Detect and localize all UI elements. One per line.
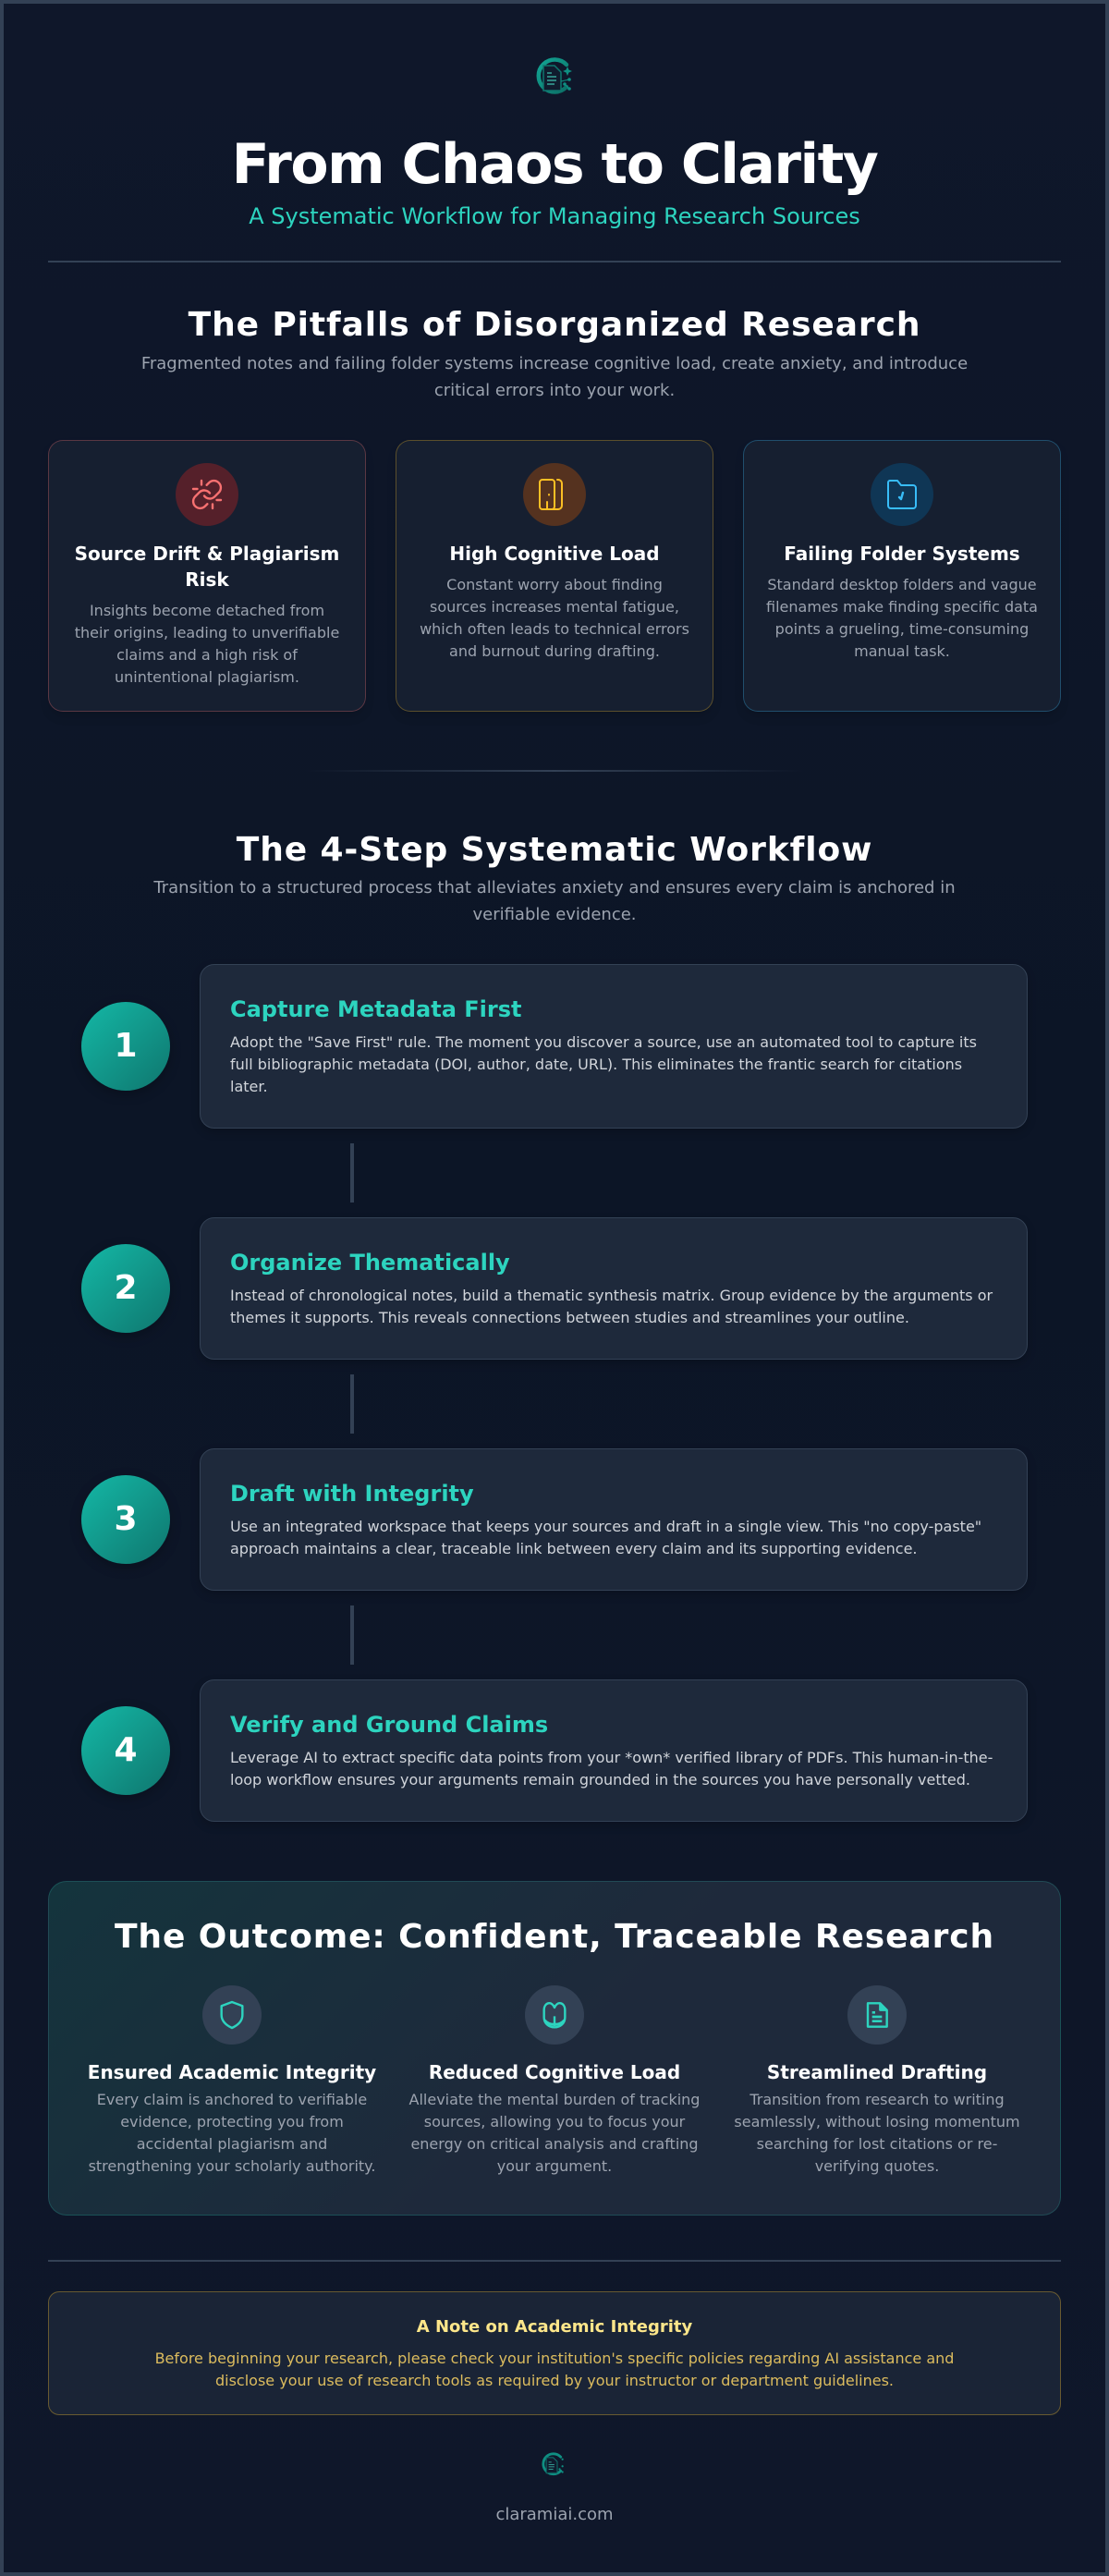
step 4 text [230, 1749, 993, 1789]
text: note: disclose your use of research tools as required by your instructor or department guidelines. [215, 2372, 894, 2389]
text: note: Before beginning your research, please check your institution's specific policies regarding AI assistance and [155, 2350, 954, 2367]
panel: source drift [48, 440, 366, 712]
text: cognitive load: sources increases mental fatigue, [430, 598, 679, 616]
step card 3 [200, 1448, 1028, 1591]
step 1 text: later. [230, 1078, 268, 1095]
heading: folder systems: Failing Folder Systems [784, 543, 1020, 565]
text: workflow intro [153, 878, 956, 924]
step 4 text: Leverage AI to extract specific data points from your *own* verified library of PDFs. This human-in-the- [230, 1749, 993, 1766]
step 3 text: Use an integrated workspace that keeps your sources and draft in a single view. This "no copy-paste" [230, 1518, 981, 1535]
panel: academic integrity note [48, 2291, 1061, 2415]
icon: folder [871, 463, 933, 526]
step number 2: 2 [114, 1269, 138, 1307]
heading: load: Reduced Cognitive Load [429, 2061, 680, 2083]
heading: outcome: The Outcome: Confident, Traceable Research [115, 1918, 994, 1956]
step number 1: 1 [114, 1027, 138, 1065]
step number 2 [81, 1244, 170, 1333]
text: pitfalls intro: Fragmented notes and failing folder systems increase cognitive load, create anxiety, and introduce [141, 354, 968, 373]
text: workflow intro: verifiable evidence. [472, 905, 637, 924]
title: From Chaos to Clarity [232, 132, 877, 197]
heading: workflow: The 4-Step Systematic Workflow [237, 831, 872, 869]
text: load: Alleviate the mental burden of tracking [409, 2091, 700, 2108]
text: source drift [75, 602, 339, 686]
step card 2 [200, 1217, 1028, 1360]
text: drafting [734, 2091, 1020, 2175]
step 1 heading: Capture Metadata First [230, 996, 521, 1022]
text: cognitive load: Constant worry about finding [446, 576, 663, 593]
text: pitfalls intro: critical errors into your work. [434, 381, 675, 400]
step 3 text: approach maintains a clear, traceable link between every claim and its supporting evidence. [230, 1540, 918, 1557]
divider [48, 261, 1061, 262]
text: integrity: evidence, protecting you from [120, 2113, 344, 2130]
text: cognitive load: and burnout during drafting. [449, 642, 660, 660]
heading: integrity: Ensured Academic Integrity [88, 2061, 376, 2083]
step number 4: 4 [114, 1731, 138, 1769]
heading: note: A Note on Academic Integrity [417, 2317, 692, 2337]
text: workflow intro: Transition to a structured process that alleviates anxiety and ensures every claim is anchored in [153, 878, 956, 897]
step 2 heading: Organize Thematically [230, 1250, 510, 1276]
text: cognitive load [420, 576, 689, 660]
step number 3 [81, 1475, 170, 1564]
section divider [305, 770, 804, 772]
step card 1 [200, 964, 1028, 1129]
step number 1 [81, 1002, 170, 1091]
step 3 heading: Draft with Integrity [230, 1481, 474, 1507]
text: load [408, 2091, 700, 2175]
text: pitfalls intro [141, 354, 968, 400]
step 2 text: themes it supports. This reveals connections between studies and streamlines your outline. [230, 1309, 909, 1326]
step 1 text: full bibliographic metadata (DOI, author, date, URL). This eliminates the frantic search for citations [230, 1056, 962, 1073]
text: drafting: searching for lost citations or re- [757, 2135, 997, 2153]
text: load: energy on critical analysis and crafting [410, 2135, 699, 2153]
text: source drift: unintentional plagiarism. [115, 668, 299, 686]
text: folder systems: points a grueling, time-consuming [775, 620, 1029, 638]
text: folder systems: Standard desktop folders and vague [767, 576, 1037, 593]
step 4 heading: Verify and Ground Claims [230, 1712, 548, 1738]
divider [48, 2260, 1061, 2262]
text: folder systems: manual task. [854, 642, 950, 660]
text: drafting: Transition from research to writing [749, 2091, 1005, 2108]
step 1 text: Adopt the "Save First" rule. The moment you discover a source, use an automated tool to capture its [230, 1033, 977, 1051]
step card 4 [200, 1679, 1028, 1822]
text: integrity: accidental plagiarism and [137, 2135, 327, 2153]
heading: pitfalls: The Pitfalls of Disorganized Research [189, 306, 920, 344]
text: source drift: Insights become detached from [90, 602, 324, 619]
step 2 text: Instead of chronological notes, build a thematic synthesis matrix. Group evidence by the arguments or [230, 1287, 993, 1304]
icon: brain [525, 1985, 584, 2045]
text: cognitive load: which often leads to technical errors [420, 620, 689, 638]
text: folder systems: filenames make finding specific data [766, 598, 1038, 616]
text: integrity: Every claim is anchored to verifiable [97, 2091, 367, 2108]
logo: top [536, 57, 572, 94]
connector 2 [350, 1374, 354, 1434]
panel: outcome [48, 1881, 1061, 2216]
connector 1 [350, 1143, 354, 1203]
text: integrity [89, 2091, 375, 2175]
step number 4 [81, 1706, 170, 1795]
text: source drift: claims and a high risk of [116, 646, 298, 664]
icon: shield [202, 1985, 262, 2045]
heading: cognitive load: High Cognitive Load [449, 543, 660, 565]
icon: document [847, 1985, 907, 2045]
heading: source drift: Source Drift & Plagiarism [75, 543, 339, 565]
icon: device [523, 463, 586, 526]
step 1 text [230, 1033, 977, 1095]
text: note [155, 2350, 954, 2389]
text: load: your argument. [497, 2157, 612, 2175]
text: load: sources, allowing you to focus your [424, 2113, 685, 2130]
footer: site url: claramiai.com [495, 2505, 614, 2524]
text: folder systems [766, 576, 1038, 660]
heading: source drift: Risk [185, 568, 229, 591]
text: drafting: seamlessly, without losing momentum [734, 2113, 1020, 2130]
logo: footer [542, 2452, 564, 2475]
heading: source drift [75, 543, 339, 591]
panel: folder systems [743, 440, 1061, 712]
text: source drift: their origins, leading to unverifiable [75, 624, 339, 641]
icon: broken link [176, 463, 238, 526]
subtitle: A Systematic Workflow for Managing Research Sources [249, 203, 860, 229]
heading: drafting: Streamlined Drafting [767, 2061, 987, 2083]
panel: cognitive load [396, 440, 713, 712]
text: drafting: verifying quotes. [815, 2157, 939, 2175]
text: integrity: strengthening your scholarly authority. [89, 2157, 375, 2175]
step 4 text: loop workflow ensures your arguments remain grounded in the sources you have personally vetted. [230, 1771, 970, 1789]
step 3 text [230, 1518, 981, 1557]
connector 3 [350, 1605, 354, 1665]
step number 3: 3 [114, 1500, 138, 1538]
step 2 text [230, 1287, 993, 1326]
